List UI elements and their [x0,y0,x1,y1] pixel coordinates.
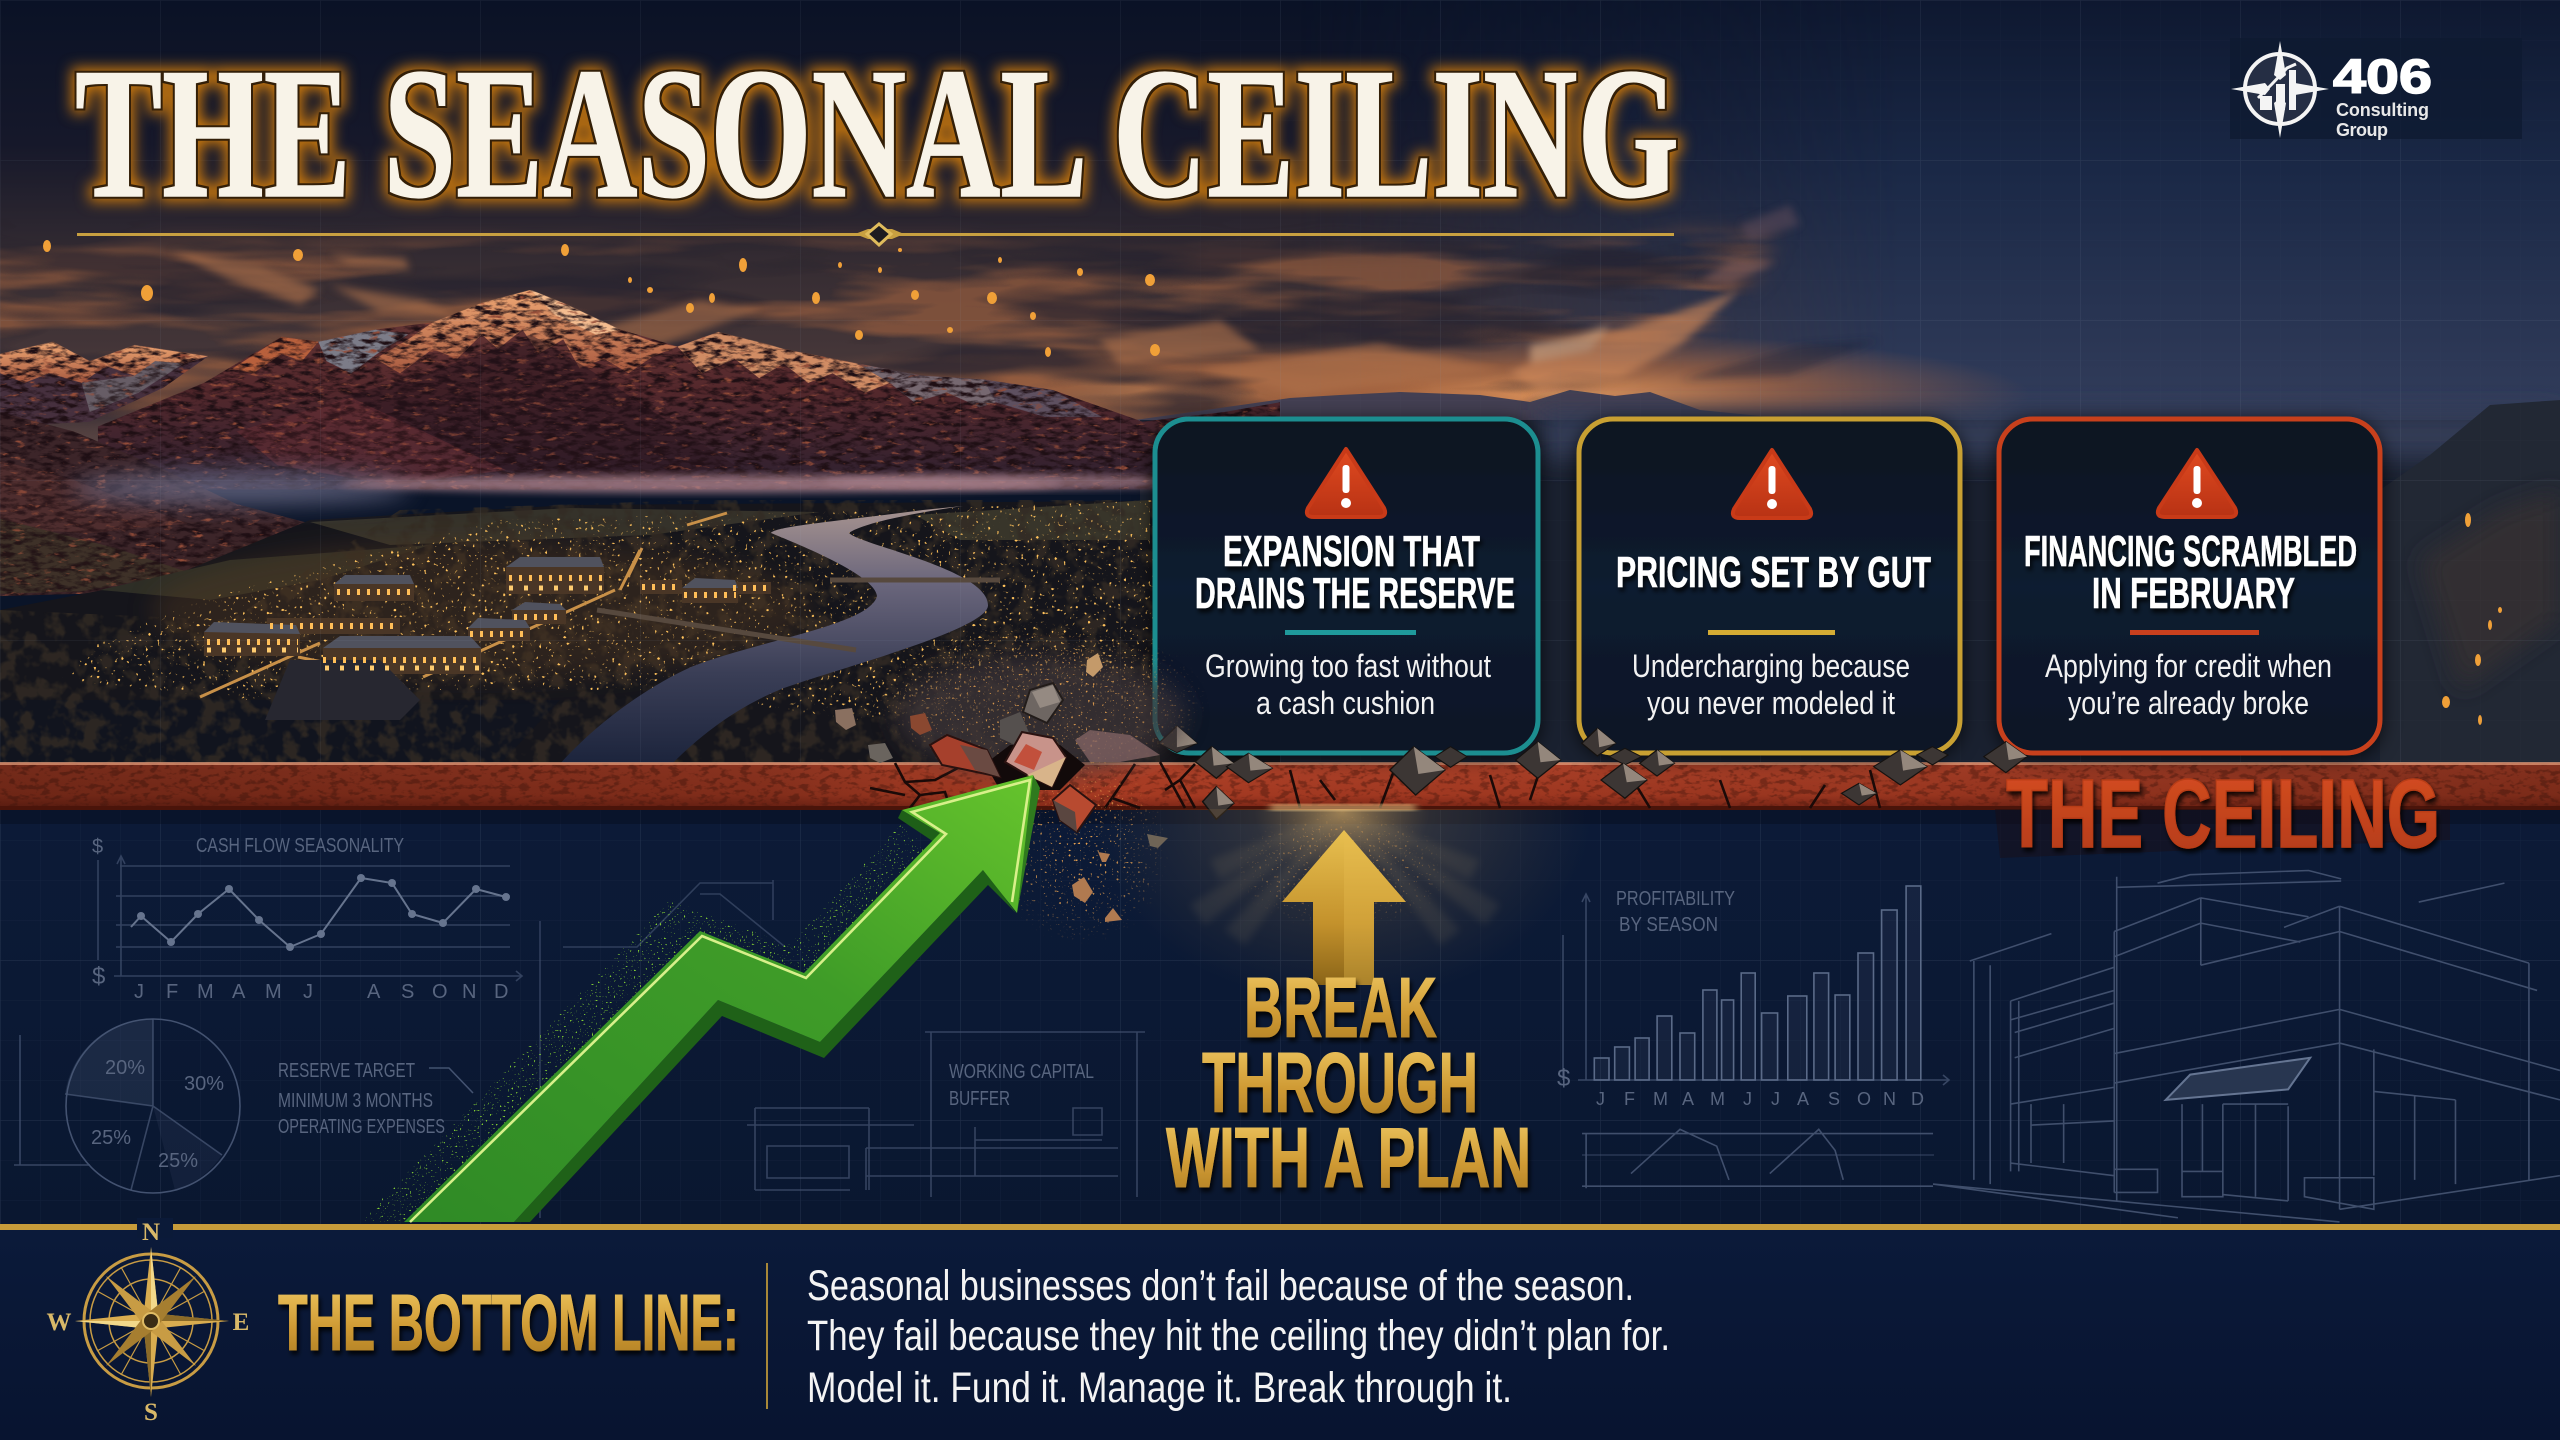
chart: reserve pie chart: 25% [158,1150,198,1172]
chart: cash flow seasonality line chart: J [134,981,144,1003]
distant mountains [1137,390,1762,421]
chart: mid blueprint sketch [540,880,1145,1218]
chart: cash flow seasonality line chart: $ [92,963,105,990]
panel: scenic sky and valley photo [0,0,2560,764]
icon: gold compass rose [46,1219,249,1426]
working capital buffer sketch: WORKING CAPITAL [949,1061,1094,1083]
title: the seasonal ceiling: THE SEASONAL CEILING [75,30,1679,237]
mountains [0,290,1280,596]
text block: bottom line message: They fail because they hit the ceiling they didn’t plan for. [807,1312,1670,1360]
logo: 406 consulting group [2230,38,2522,140]
chart: profitability by season bar chart: A [1797,1089,1809,1109]
card: pricing set by gut [1579,419,1960,753]
icon: compass with bars [2231,41,2329,138]
card title: IN FEBRUARY [2092,569,2295,618]
card title: EXPANSION THAT [1223,527,1480,576]
card title [2024,527,2357,618]
icon: blueprint storefront building [1582,870,2560,1222]
card description: Undercharging because [1632,648,1910,684]
chart: cash flow seasonality line chart: D [494,981,508,1003]
heading: the bottom line: THE BOTTOM LINE: [278,1278,739,1367]
chart: profitability by season bar chart: M [1653,1089,1668,1109]
card divider [1708,630,1835,635]
text block: bottom line message [807,1262,1670,1412]
text block: bottom line message: Seasonal businesses don’t fail because of the season. [807,1262,1634,1310]
chart: profitability by season bar chart: A [1682,1089,1694,1109]
card description: you never modeled it [1647,685,1895,721]
chart: reserve pie chart: 30% [184,1073,224,1095]
chart: profitability by season bar chart: J [1771,1089,1780,1109]
icon: gold compass rose: N [142,1219,160,1246]
sunset clouds [170,205,1800,395]
mountain lit faces and shadows [0,290,1102,594]
panel: bottom line band [0,1218,2560,1440]
chart: profitability by season bar chart: M [1710,1089,1725,1109]
card: financing scrambled in february [1999,419,2380,753]
icon: river [560,506,988,764]
chart: cash flow seasonality line chart: O [432,981,448,1003]
reserve target note [278,1060,473,1138]
card divider [1285,630,1416,635]
card description: Applying for credit when [2045,648,2332,684]
chart: cash flow seasonality line chart: N [462,981,476,1003]
text: break through with a plan: WITH A PLAN [1166,1111,1531,1206]
divider: vertical gold rule [766,1263,768,1409]
card divider [2130,630,2259,635]
divider: gold title rule with diamond [77,224,1674,245]
icon: rock rubble along the wall [1159,726,2027,819]
chart title: BY SEASON [1619,914,1718,936]
chart title: PROFITABILITY [1616,888,1735,910]
reserve target note: OPERATING EXPENSES [278,1116,445,1138]
card title: FINANCING SCRAMBLED [2024,527,2357,576]
chart: profitability by season bar chart: J [1743,1089,1752,1109]
card description [1205,648,1491,721]
icon: town roads [200,513,727,697]
chart: reserve pie chart: 25% [91,1127,131,1149]
chart title [1616,888,1735,936]
logo: 406 consulting group: 406 [2333,51,2432,104]
chart title: CASH FLOW SEASONALITY [196,835,404,857]
chart: profitability by season bar chart: D [1911,1089,1924,1109]
icon: gold compass rose: S [144,1399,158,1426]
arrow: gold break-through arrow with rays [1132,804,1553,985]
logo: 406 consulting group: Group [2336,120,2388,140]
chart: cash flow seasonality line chart: A [367,981,381,1003]
chart: profitability by season bar chart: J [1596,1089,1605,1109]
icon: warning triangle [1307,449,1385,517]
working capital buffer sketch [747,1032,1145,1197]
card title: PRICING SET BY GUT [1616,548,1931,597]
text: break through with a plan: BREAK [1244,961,1437,1056]
chart: cash flow seasonality line chart: A [232,981,246,1003]
chart: reserve pie chart [14,1019,473,1193]
card description: you’re already broke [2068,685,2309,721]
chart: profitability by season bar chart: O [1857,1089,1871,1109]
card: expansion that drains the reserve [1155,419,1538,753]
card title: DRAINS THE RESERVE [1195,569,1515,618]
logo: 406 consulting group: Consulting [2336,100,2429,120]
ground right of valley [1140,420,2560,764]
chart: reserve pie chart: 20% [105,1057,145,1079]
cracks [870,762,1880,808]
text block: bottom line message: Model it. Fund it. Manage it. Break through it. [807,1364,1512,1412]
icon: warning triangle [2158,450,2236,517]
chart: cash flow seasonality line chart: M [197,981,214,1003]
chart: profitability by season bar chart: N [1883,1089,1896,1109]
panel: the ceiling wall [0,762,2560,824]
card description: a cash cushion [1256,685,1435,721]
icon: impact burst with red rocks [835,620,1210,945]
icon: gold compass rose: W [46,1309,72,1336]
chart: profitability by season bar chart: $ [1557,1065,1570,1092]
icon: warning triangle [1733,450,1811,518]
chart: profitability by season bar chart: S [1828,1089,1840,1109]
icon: green growth arrow [360,775,1040,1222]
chart: cash flow seasonality line chart: $ [92,836,103,858]
chart: profitability by season bar chart: F [1624,1089,1635,1109]
chart: cash flow seasonality line chart: S [401,981,414,1003]
chart: cash flow seasonality line chart: F [166,981,178,1003]
card description: Growing too fast without [1205,648,1491,684]
icon: bridges [597,580,1000,650]
panel: lower blueprint background [0,764,2560,1228]
text: break through with a plan: THROUGH [1202,1036,1478,1131]
chart: cash flow seasonality line chart: J [303,981,313,1003]
chart: cash flow seasonality line chart: M [265,981,282,1003]
valley floor [0,500,1280,764]
chart: cash flow seasonality line chart [92,835,522,1003]
card title [1195,527,1515,618]
working capital buffer sketch: BUFFER [949,1088,1010,1110]
chart: profitability by season bar chart [1557,886,1949,1225]
icon: gold compass rose: E [233,1309,249,1336]
icon: embers in sky [43,240,2502,725]
reserve target note: RESERVE TARGET [278,1060,415,1082]
text: break through with a plan [1166,961,1531,1206]
icon: town buildings [204,557,771,720]
reserve target note: MINIMUM 3 MONTHS [278,1090,433,1112]
card description [1632,648,1910,721]
mist [70,472,410,504]
card description [2045,648,2332,721]
